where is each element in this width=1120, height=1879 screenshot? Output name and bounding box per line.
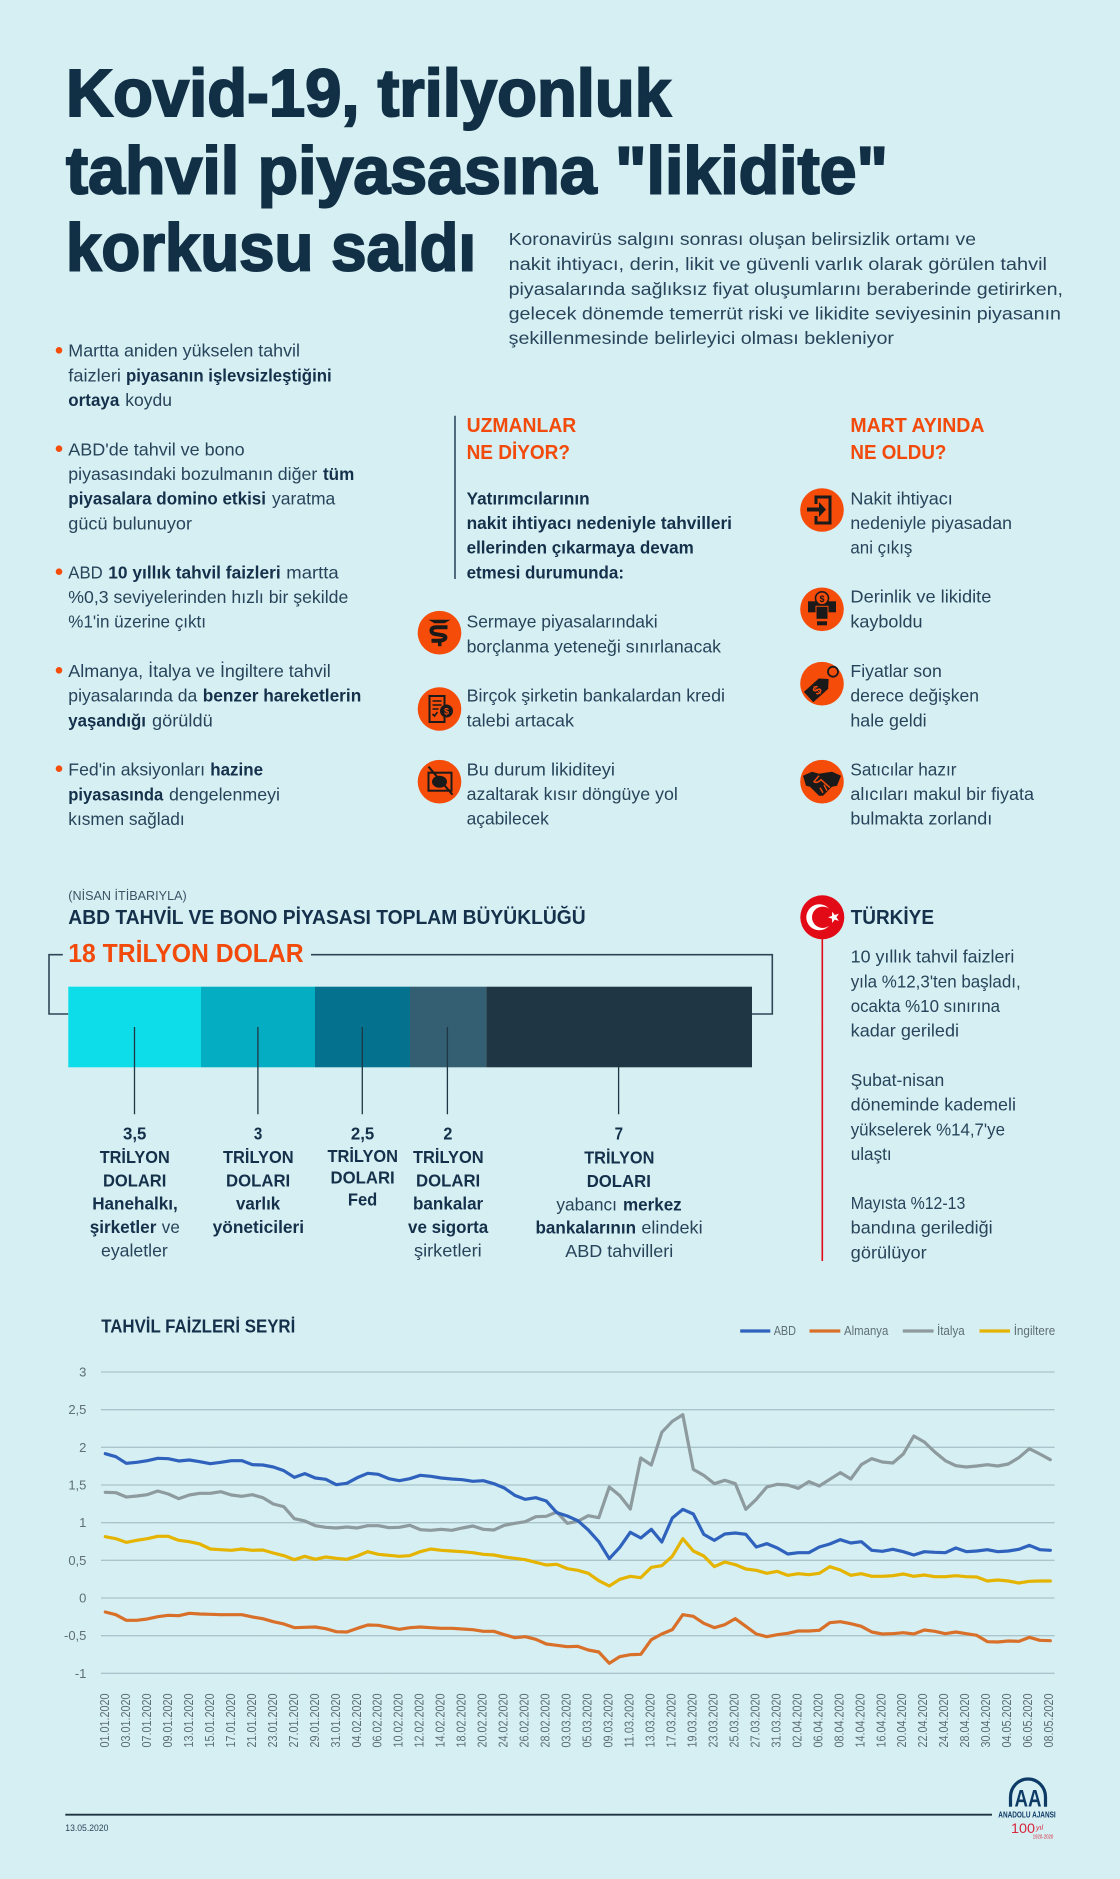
- x axis date labels: 23.03.2020: [706, 1693, 720, 1748]
- x axis date labels: [98, 1693, 1056, 1748]
- heading: market size: [68, 888, 586, 929]
- x axis date labels: 24.04.2020: [937, 1693, 951, 1748]
- text: market exit: [850, 488, 1012, 558]
- experts lead text: etmesi durumunda:: [467, 562, 624, 582]
- x axis date labels: 24.02.2020: [497, 1693, 511, 1748]
- icon: crossed banknote: [418, 760, 461, 804]
- experts lead text: Yatırımcılarının: [467, 488, 590, 508]
- title: korkusu saldı: [66, 211, 476, 286]
- text: Türkiye yields: Mayısta %12-13: [851, 1193, 965, 1213]
- legend: ABD: [774, 1324, 796, 1338]
- text: buyers and sellers: [850, 759, 1034, 828]
- bullet point 3: 10 yıllık tahvil faizleri: [108, 562, 281, 582]
- segment label: asset managers: yöneticileri: [213, 1217, 304, 1237]
- x axis date labels: 04.05.2020: [1000, 1693, 1014, 1748]
- text: volatile prices: hale geldi: [850, 710, 927, 730]
- bullet point 2: gücü bulunuyor: [68, 513, 192, 533]
- icon: hand with money: $: [819, 594, 825, 604]
- x axis date labels: 17.03.2020: [664, 1693, 678, 1748]
- heading: experts: NE DİYOR?: [467, 441, 570, 464]
- text: volatile prices: Fiyatlar son: [850, 661, 942, 681]
- text: Türkiye yields: ocakta %10 sınırına: [851, 996, 1000, 1016]
- segment label: households: [90, 1123, 180, 1260]
- icon: handshake: [800, 760, 844, 804]
- segment label: banks and insurers: şirketleri: [414, 1240, 482, 1260]
- bullet point 2: yaratma: [272, 489, 336, 509]
- segment label: foreign central banks: TRİLYON: [584, 1148, 654, 1168]
- bullet point 4: piyasalarında da: [68, 686, 198, 706]
- bullet point 2: piyasasındaki bozulmanın diğer: [68, 464, 317, 484]
- text: credit demand: [467, 686, 725, 730]
- legend: İtalya: [937, 1324, 965, 1338]
- text: borrowing capacity: Sermaye piyasalarındaki: [467, 612, 658, 632]
- text: Türkiye yields: yükselerek %14,7'ye: [851, 1119, 1005, 1139]
- segment label: banks and insurers: [408, 1123, 488, 1260]
- bullet point 4: benzer hareketlerin: [203, 686, 361, 706]
- panel: key points: [56, 341, 361, 829]
- y axis labels: 1: [79, 1515, 86, 1530]
- x axis date labels: 02.04.2020: [790, 1693, 804, 1748]
- chart heading: TAHVİL FAİZLERİ SEYRİ: [101, 1317, 295, 1337]
- x axis date labels: 30.04.2020: [979, 1693, 993, 1748]
- heading: March: NE OLDU?: [850, 441, 946, 464]
- text: depth and liquidity: kayboldu: [850, 612, 922, 632]
- segment label: Fed: DOLARI: [330, 1168, 395, 1188]
- segment label: households: TRİLYON: [100, 1147, 170, 1167]
- bullet point 3: %1'in üzerine çıktı: [68, 612, 206, 632]
- segment label: households: şirketler: [90, 1217, 157, 1237]
- logo: Anadolu Ajansı: [998, 1779, 1056, 1840]
- x axis date labels: 28.02.2020: [539, 1693, 553, 1748]
- bullet point 5: [56, 759, 280, 829]
- intro paragraph: piyasalarında sağlıksız fiyat oluşumlarını beraberinde getirirken,: [509, 279, 1063, 299]
- segment label: asset managers: DOLARI: [226, 1170, 290, 1190]
- bullet point 3: ABD: [68, 562, 103, 582]
- text: Türkiye yields: ulaştı: [851, 1144, 892, 1164]
- title: tahvil piyasasına "likidite": [66, 133, 888, 208]
- text: Türkiye yields: yıla %12,3'ten başladı,: [851, 971, 1021, 991]
- x axis date labels: 10.02.2020: [392, 1693, 406, 1748]
- x axis date labels: 17.01.2020: [224, 1693, 238, 1748]
- segment label: banks and insurers: 2: [443, 1123, 453, 1143]
- text: credit demand: talebi artacak: [467, 710, 574, 730]
- segment label: households: 3,5: [123, 1123, 147, 1143]
- icon: hand with money: [800, 588, 844, 631]
- title: Kovid-19, trilyonluk: [66, 56, 672, 131]
- legend: [740, 1324, 1055, 1338]
- x axis date labels: 20.02.2020: [476, 1693, 490, 1748]
- heading: Türkiye: TÜRKİYE: [851, 906, 934, 929]
- text: Türkiye yields: Şubat-nisan: [851, 1070, 944, 1090]
- x axis date labels: 05.03.2020: [580, 1693, 594, 1748]
- logo: Anadolu Ajansı: 1920-2020: [1033, 1834, 1053, 1840]
- x axis date labels: 04.02.2020: [350, 1693, 364, 1748]
- text: depth and liquidity: [850, 587, 991, 632]
- icon: price tag: [800, 662, 844, 706]
- y axis labels: 3: [79, 1364, 86, 1380]
- title: [66, 56, 888, 286]
- x axis date labels: 09.03.2020: [602, 1693, 616, 1748]
- segment label: asset managers: varlık: [236, 1194, 280, 1214]
- x axis date labels: 28.04.2020: [958, 1693, 972, 1748]
- text: Türkiye yields: bandına gerilediği: [851, 1218, 993, 1238]
- x axis date labels: 01.01.2020: [98, 1693, 112, 1748]
- x axis date labels: 15.01.2020: [203, 1693, 217, 1748]
- text: vicious cycle: [467, 759, 678, 828]
- text: Türkiye yields: [851, 947, 1021, 1262]
- x axis date labels: 26.02.2020: [518, 1693, 532, 1748]
- icon: credit document: $: [444, 706, 449, 716]
- text: vicious cycle: açabilecek: [467, 808, 549, 828]
- bullet point 5: Fed'in aksiyonları: [68, 759, 205, 779]
- text: borrowing capacity: [467, 612, 721, 656]
- series: İngiltere: [105, 1536, 1050, 1586]
- text: borrowing capacity: borçlanma yeteneği sınırlanacak: [467, 636, 721, 656]
- bullet point 4: Almanya, İtalya ve İngiltere tahvil: [68, 661, 331, 681]
- segment label: foreign central banks: DOLARI: [587, 1171, 651, 1191]
- y axis labels: [64, 1364, 86, 1681]
- text: buyers and sellers: alıcıları makul bir fiyata: [850, 784, 1034, 804]
- segment label: foreign central banks: elindeki: [641, 1218, 703, 1238]
- x axis date labels: 19.03.2020: [685, 1693, 699, 1748]
- x axis date labels: 27.03.2020: [748, 1693, 762, 1748]
- x axis date labels: 16.04.2020: [874, 1693, 888, 1748]
- bullet point 4: görüldü: [152, 710, 213, 730]
- intro paragraph: Koronavirüs salgını sonrası oluşan belirsizlik ortamı ve: [509, 229, 976, 249]
- intro paragraph: gelecek dönemde temerrüt riski ve likidite seviyesinin piyasanın: [509, 304, 1061, 324]
- x axis date labels: 06.02.2020: [371, 1693, 385, 1748]
- bullet point 5: dengelenmeyi: [169, 784, 280, 804]
- intro paragraph: nakit ihtiyacı, derin, likit ve güvenli varlık olarak görülen tahvil: [509, 254, 1047, 274]
- text: Türkiye yields: görülüyor: [851, 1242, 927, 1262]
- text: Türkiye yields: döneminde kademeli: [851, 1095, 1016, 1115]
- segment label: foreign central banks: ABD tahvilleri: [565, 1241, 673, 1261]
- bullet point 1: faizleri: [68, 365, 121, 385]
- heading: experts: UZMANLAR: [467, 414, 576, 437]
- y axis labels: -0,5: [64, 1628, 86, 1643]
- bullet point 5: piyasasında: [68, 784, 164, 804]
- bullet point 5: hazine: [210, 759, 263, 779]
- bullet point 1: koydu: [125, 390, 172, 410]
- bullet point 3: [56, 562, 348, 632]
- y axis labels: 2,5: [68, 1402, 86, 1417]
- x axis date labels: 13.01.2020: [182, 1693, 196, 1748]
- segment label: Fed: Fed: [348, 1190, 377, 1210]
- heading: market size: ABD TAHVİL VE BONO PİYASASI TOPLAM BÜYÜKLÜĞÜ: [68, 905, 586, 929]
- legend: İngiltere: [1014, 1324, 1055, 1338]
- bullet point 4: yaşandığı: [68, 710, 146, 730]
- date: 13.05.2020: [65, 1823, 108, 1834]
- text: credit demand: Birçok şirketin bankalardan kredi: [467, 686, 725, 706]
- bullet point 1: piyasanın işlevsizleştiğini: [126, 365, 332, 385]
- text: vicious cycle: azaltarak kısır döngüye yol: [467, 784, 678, 804]
- intro paragraph: şekillenmesinde belirleyici olması bekleniyor: [509, 328, 894, 348]
- experts lead text: ellerinden çıkarmaya devam: [467, 538, 694, 558]
- x axis date labels: 20.04.2020: [895, 1693, 909, 1748]
- bullet point 3: martta: [286, 562, 339, 582]
- logo: Anadolu Ajansı: yıl: [1035, 1825, 1043, 1832]
- segment label: asset managers: TRİLYON: [223, 1147, 294, 1167]
- x axis date labels: 03.03.2020: [560, 1693, 574, 1748]
- x axis date labels: 23.01.2020: [266, 1693, 280, 1748]
- text: market exit: nedeniyle piyasadan: [850, 513, 1012, 533]
- x axis date labels: 29.01.2020: [308, 1693, 322, 1748]
- panel: Türkiye: [800, 895, 1021, 1262]
- panel: experts: [418, 414, 732, 828]
- segment label: banks and insurers: TRİLYON: [413, 1147, 484, 1167]
- icon: Turkish flag: [800, 895, 844, 939]
- segment label: Fed: 2,5: [351, 1123, 375, 1143]
- text: depth and liquidity: Derinlik ve likidite: [850, 587, 991, 607]
- y axis labels: 0: [79, 1590, 86, 1606]
- x axis date labels: 14.04.2020: [853, 1693, 867, 1748]
- segment label: households: DOLARI: [103, 1170, 166, 1190]
- x axis date labels: 14.02.2020: [434, 1693, 448, 1748]
- logo: Anadolu Ajansı: 100: [1011, 1820, 1035, 1836]
- y axis labels: -1: [75, 1666, 86, 1681]
- icon: exit door: [800, 488, 844, 532]
- heading: experts: [467, 414, 576, 464]
- experts lead text: [467, 488, 732, 582]
- intro paragraph: [509, 229, 1063, 348]
- series: İtalya: [105, 1415, 1050, 1530]
- segment label: foreign central banks: 7: [615, 1123, 623, 1143]
- text: market exit: Nakit ihtiyacı: [850, 488, 953, 508]
- text: volatile prices: [850, 661, 979, 730]
- total value: 18 TRİLYON DOLAR: [68, 940, 304, 968]
- text: vicious cycle: Bu durum likiditeyi: [467, 759, 615, 779]
- legend: Almanya: [844, 1324, 888, 1338]
- x axis date labels: 18.02.2020: [455, 1693, 469, 1748]
- bullet point 3: %0,3 seviyelerinden hızlı bir şekilde: [68, 587, 348, 607]
- bullet point 1: Martta aniden yükselen tahvil: [68, 341, 300, 361]
- segment label: foreign central banks: [536, 1123, 703, 1261]
- x axis date labels: 31.03.2020: [769, 1693, 783, 1748]
- series: ABD: [105, 1454, 1050, 1559]
- y axis labels: 2: [79, 1440, 86, 1455]
- logo: Anadolu Ajansı: AA: [1014, 1786, 1042, 1813]
- segment label: Fed: [328, 1123, 398, 1210]
- panel: US bond market size: [49, 888, 772, 1261]
- segment label: foreign central banks: merkez: [623, 1194, 682, 1214]
- icon: borrowing capacity: [418, 611, 461, 654]
- panel: bond yields chart: [64, 1317, 1056, 1748]
- x axis date labels: 12.02.2020: [413, 1693, 427, 1748]
- y axis labels: 0,5: [68, 1553, 86, 1568]
- x axis date labels: 11.03.2020: [622, 1693, 636, 1748]
- text: buyers and sellers: Satıcılar hazır: [850, 759, 957, 779]
- bullet point 2: [56, 439, 354, 533]
- text: Türkiye yields: kadar geriledi: [851, 1020, 959, 1040]
- x axis date labels: 06.04.2020: [811, 1693, 825, 1748]
- segment label: households: ve: [162, 1217, 180, 1237]
- panel: what happened in March: [800, 414, 1034, 828]
- segment label: households: Hanehalkı,: [92, 1194, 178, 1214]
- x axis date labels: 25.03.2020: [727, 1693, 741, 1748]
- x axis date labels: 09.01.2020: [161, 1693, 175, 1748]
- heading: March: [850, 414, 985, 464]
- series: Almanya: [105, 1612, 1050, 1663]
- bullet point 2: ABD'de tahvil ve bono: [68, 439, 245, 459]
- experts lead text: nakit ihtiyacı nedeniyle tahvilleri: [467, 513, 732, 533]
- heading: market size: (NİSAN İTİBARIYLA): [68, 888, 187, 903]
- segment label: banks and insurers: ve sigorta: [408, 1217, 488, 1237]
- bullet point 4: [56, 661, 361, 730]
- segment label: asset managers: 3: [254, 1123, 263, 1143]
- x axis date labels: 27.01.2020: [287, 1693, 301, 1748]
- stacked bar: [68, 987, 752, 1067]
- x axis date labels: 07.01.2020: [140, 1693, 154, 1748]
- x axis date labels: 31.01.2020: [329, 1693, 343, 1748]
- x axis date labels: 21.01.2020: [245, 1693, 259, 1748]
- bullet point 1: ortaya: [68, 390, 120, 410]
- segment label: banks and insurers: DOLARI: [416, 1170, 480, 1190]
- text: Türkiye yields: 10 yıllık tahvil faizleri: [851, 947, 1014, 967]
- bullet point 2: piyasalara domino etkisi: [68, 489, 266, 509]
- bullet point 2: tüm: [323, 464, 354, 484]
- segment label: households: eyaletler: [101, 1240, 168, 1260]
- y axis labels: 1,5: [68, 1478, 86, 1492]
- x axis date labels: 13.03.2020: [644, 1693, 658, 1748]
- icon: price tag: $: [809, 682, 825, 698]
- heading: March: MART AYINDA: [850, 414, 985, 437]
- x axis date labels: 03.01.2020: [119, 1693, 133, 1748]
- bullet point 1: [56, 341, 332, 410]
- segment label: foreign central banks: bankalarının: [536, 1218, 636, 1238]
- bullet point 5: kısmen sağladı: [68, 809, 185, 829]
- segment label: asset managers: [213, 1123, 304, 1237]
- text: volatile prices: derece değişken: [850, 686, 979, 706]
- x axis date labels: 08.05.2020: [1042, 1693, 1056, 1748]
- icon: credit document: [418, 687, 461, 731]
- x axis date labels: 22.04.2020: [916, 1693, 930, 1748]
- text: buyers and sellers: bulmakta zorlandı: [850, 808, 992, 828]
- text: market exit: ani çıkış: [850, 538, 913, 558]
- segment label: Fed: TRİLYON: [328, 1146, 398, 1166]
- footer: [65, 1779, 1056, 1840]
- x axis date labels: 08.04.2020: [832, 1693, 846, 1748]
- x axis date labels: 06.05.2020: [1021, 1693, 1035, 1748]
- logo: Anadolu Ajansı: ANADOLU AJANSI: [998, 1810, 1056, 1820]
- segment label: foreign central banks: yabancı: [556, 1194, 617, 1214]
- line chart series: [105, 1415, 1050, 1663]
- segment label: banks and insurers: bankalar: [413, 1194, 483, 1214]
